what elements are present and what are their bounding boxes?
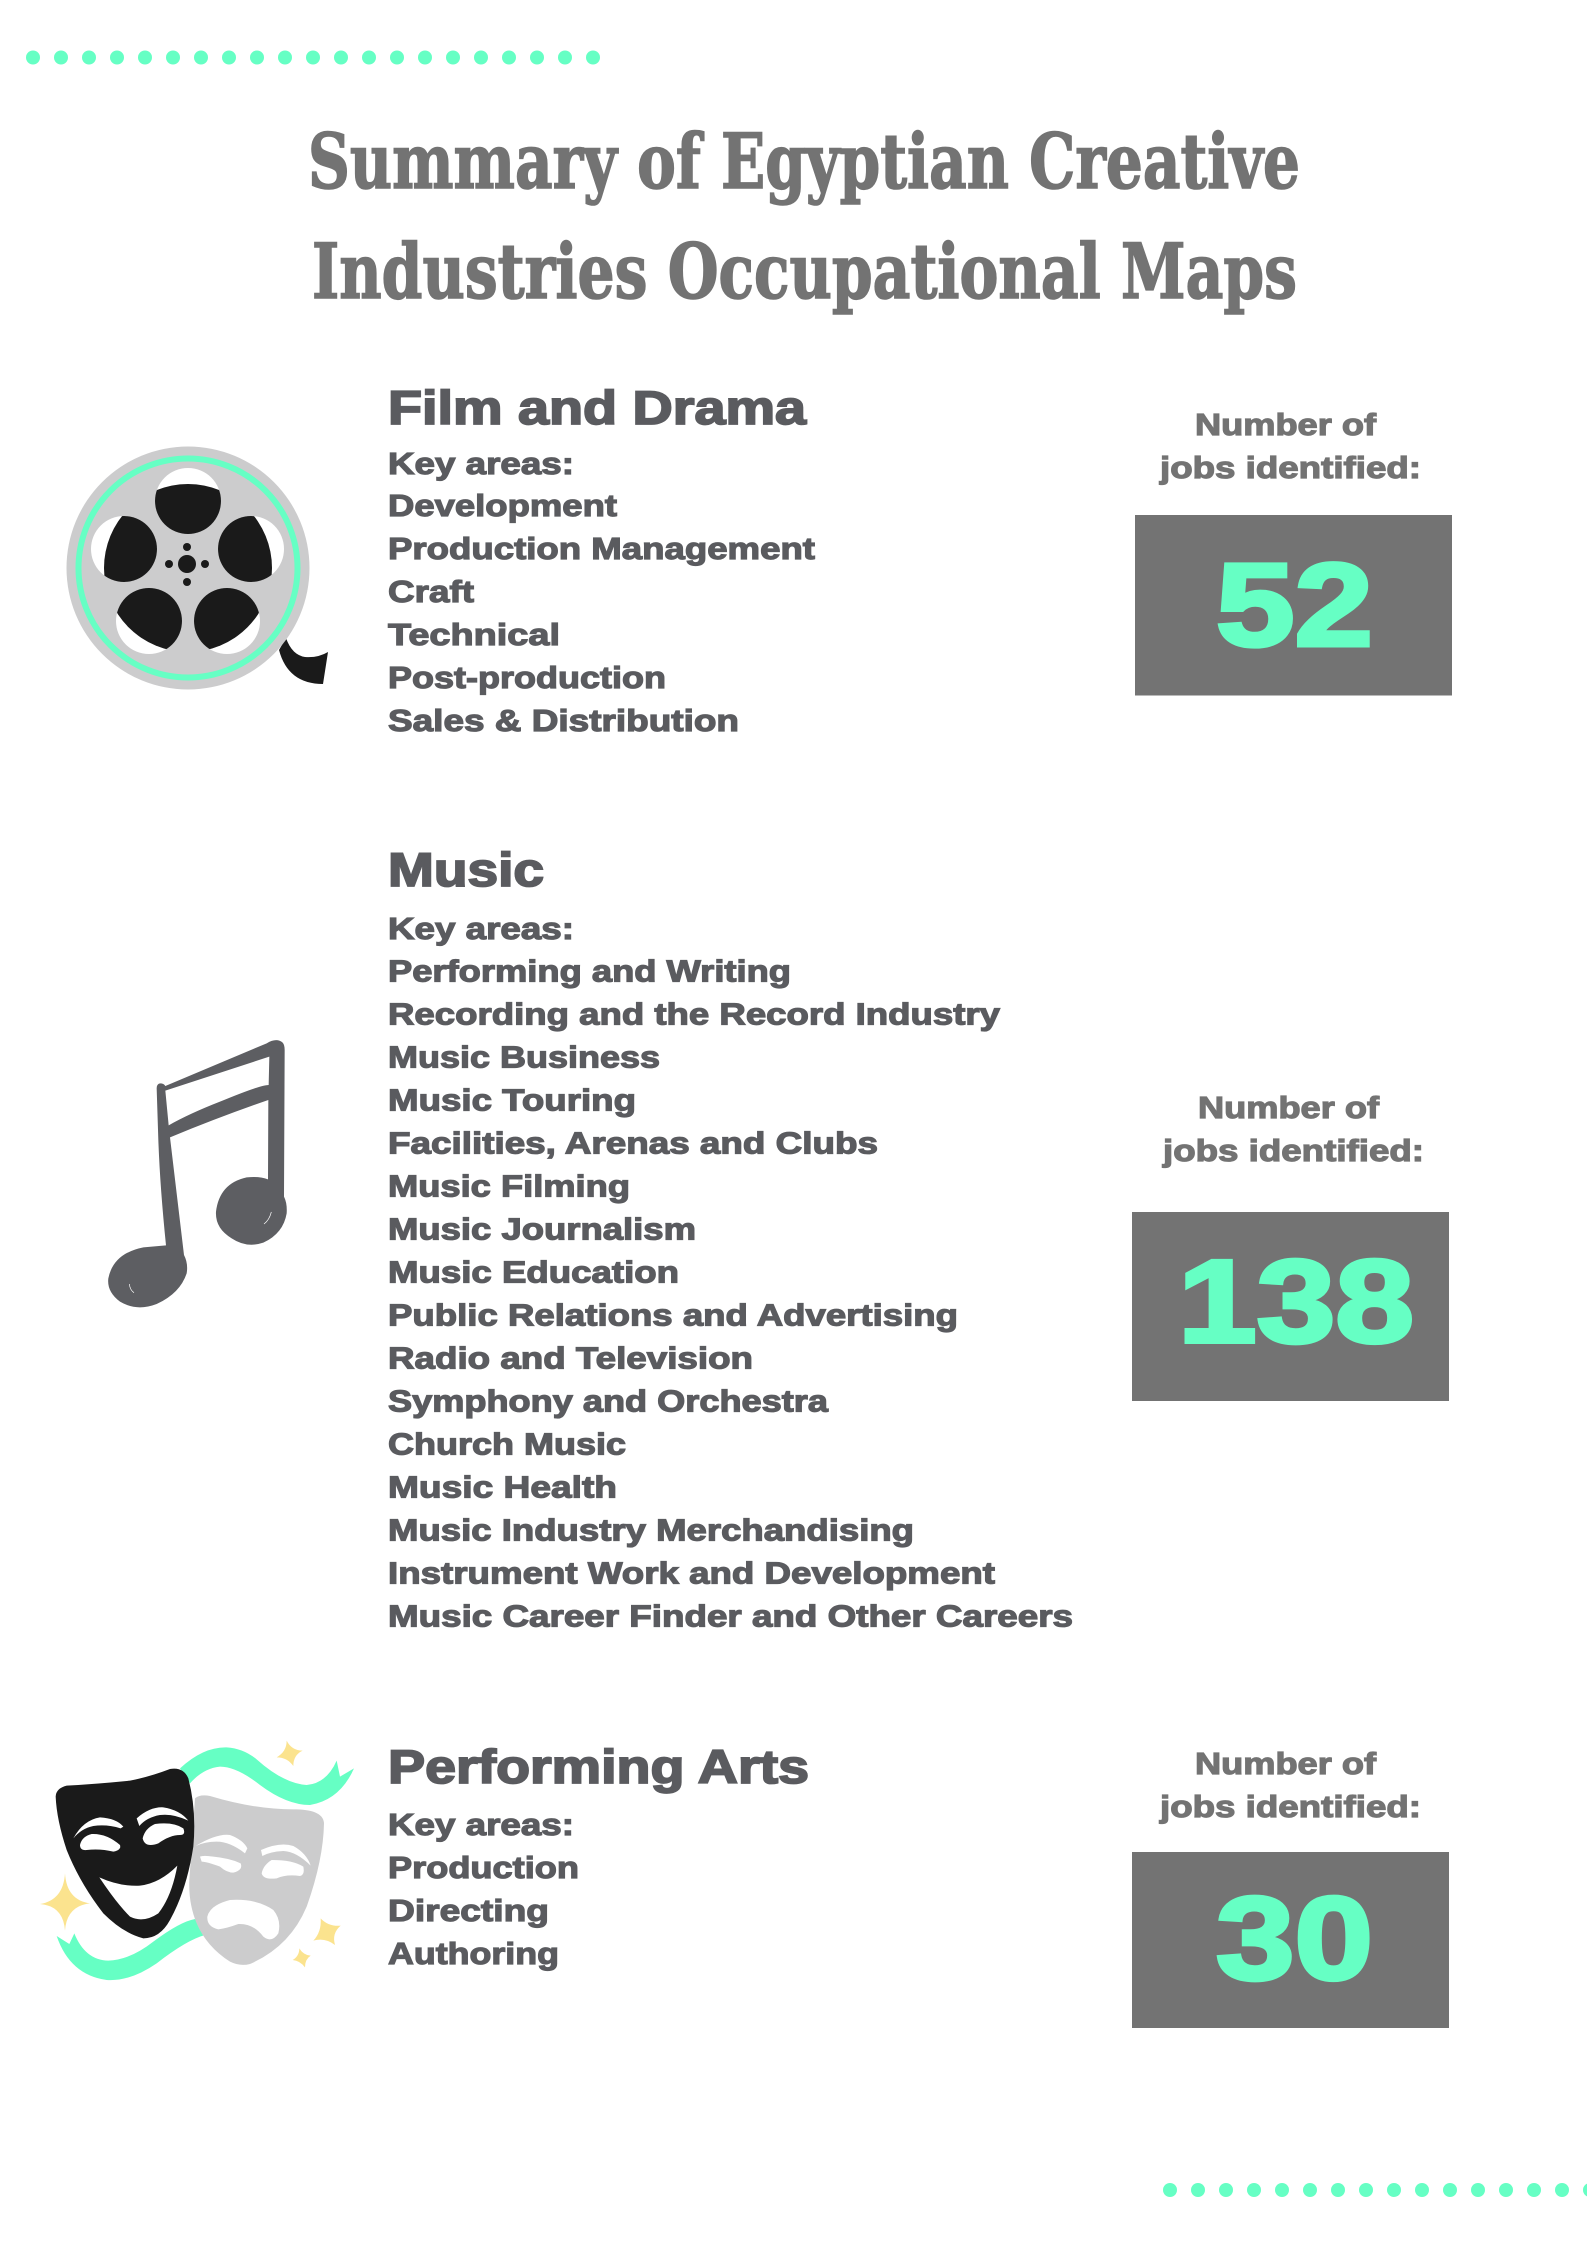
text block: film key areas: Production Management	[388, 531, 815, 566]
text block: film key areas: Craft	[388, 574, 474, 609]
text block: music key areas: Facilities, Arenas and Clubs	[388, 1126, 878, 1160]
text block: performing arts key areas	[388, 1807, 579, 1971]
text block: music key areas: Instrument Work and Development	[388, 1556, 995, 1590]
stat box: 30 jobs	[1132, 1852, 1449, 2028]
text block: music key areas: Music Business	[388, 1040, 660, 1074]
text block: film key areas: Development	[388, 488, 617, 523]
text block: music key areas: Public Relations and Advertising	[388, 1298, 958, 1332]
title	[308, 117, 1300, 316]
panel: performing arts	[40, 1740, 1449, 2028]
panel: film and drama	[66, 381, 1452, 738]
heading: performing arts: Performing Arts	[388, 1740, 809, 1793]
text block: film key areas: Sales & Distribution	[388, 703, 739, 738]
label: performing arts number of jobs: jobs identified:	[1159, 1789, 1421, 1824]
stat box: 138 jobs	[1132, 1212, 1449, 1401]
label: film number of jobs	[1159, 407, 1421, 485]
label: music number of jobs: jobs identified:	[1162, 1133, 1424, 1168]
text block: music key areas: Key areas:	[388, 911, 574, 946]
text block: film key areas	[388, 446, 815, 738]
label: film number of jobs: jobs identified:	[1159, 450, 1421, 485]
decorative dotted line: bottom	[1163, 2183, 1587, 2197]
text block: music key areas: Recording and the Record Industry	[388, 996, 1001, 1032]
stat box: 52 jobs: 52	[1216, 540, 1373, 672]
heading: film and drama: Film and Drama	[388, 381, 807, 434]
label: film number of jobs: Number of	[1195, 407, 1377, 442]
title: Summary of Egyptian Creative	[308, 117, 1300, 206]
text block: music key areas	[388, 911, 1073, 1634]
text block: music key areas: Church Music	[388, 1426, 626, 1462]
icon: theatre masks	[40, 1741, 354, 1980]
label: music number of jobs: Number of	[1198, 1090, 1380, 1125]
title: Industries Occupational Maps	[312, 227, 1297, 316]
text block: film key areas: Key areas:	[388, 446, 574, 481]
text block: performing arts key areas: Authoring	[388, 1936, 559, 1971]
panel: music	[108, 843, 1449, 1634]
label: music number of jobs	[1162, 1090, 1424, 1168]
label: performing arts number of jobs	[1159, 1746, 1421, 1824]
stat box: 52 jobs	[1135, 515, 1452, 696]
text block: music key areas: Music Health	[388, 1470, 617, 1504]
text block: music key areas: Performing and Writing	[388, 954, 791, 988]
text block: music key areas: Radio and Television	[388, 1340, 753, 1376]
text block: music key areas: Music Filming	[388, 1168, 630, 1204]
text block: performing arts key areas: Key areas:	[388, 1807, 574, 1842]
stat box: 30 jobs: 30	[1216, 1873, 1373, 2005]
text block: performing arts key areas: Production	[388, 1850, 579, 1885]
text block: music key areas: Music Journalism	[388, 1212, 696, 1246]
decorative dotted line: top	[26, 50, 600, 64]
text block: music key areas: Symphony and Orchestra	[388, 1384, 829, 1418]
text block: music key areas: Music Education	[388, 1254, 679, 1290]
text block: performing arts key areas: Directing	[388, 1893, 549, 1928]
text block: music key areas: Music Touring	[388, 1082, 636, 1118]
stat box: 138 jobs: 138	[1178, 1236, 1414, 1368]
icon: film reel	[66, 446, 328, 690]
label: performing arts number of jobs: Number of	[1195, 1746, 1377, 1781]
text block: music key areas: Music Industry Merchandising	[388, 1512, 914, 1548]
text block: music key areas: Music Career Finder and Other Careers	[388, 1598, 1073, 1634]
icon: music notes	[108, 1040, 287, 1307]
text block: film key areas: Technical	[388, 617, 560, 652]
heading: music: Music	[388, 843, 544, 896]
text block: film key areas: Post-production	[388, 660, 666, 695]
